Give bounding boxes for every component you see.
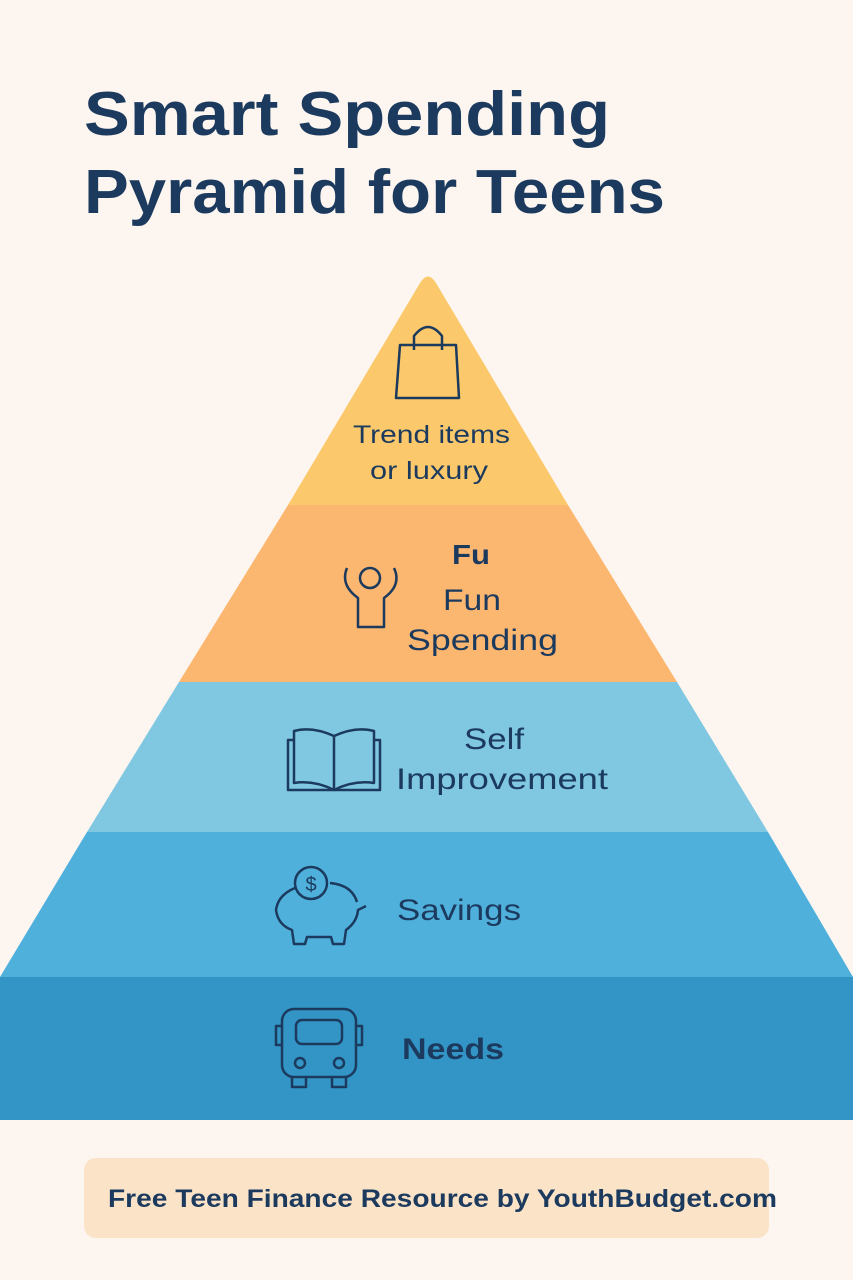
layer: self improvement — [87, 682, 768, 832]
layer: needs — [0, 977, 853, 1120]
footer banner — [84, 1158, 777, 1238]
text: savings: Savings — [397, 894, 521, 927]
text: fun spending — [407, 539, 558, 657]
footer banner: Free Teen Finance Resource by YouthBudget.com — [108, 1185, 777, 1213]
icon: bus — [276, 1009, 362, 1087]
text: self improvement: Improvement — [396, 763, 609, 796]
text: trend items: Trend items — [353, 421, 510, 449]
icon: person — [345, 568, 396, 627]
title: Smart Spending — [84, 80, 610, 149]
layer: fun spending — [179, 505, 677, 682]
text: fun spending: Spending — [407, 624, 558, 657]
icon: piggy bank — [276, 867, 366, 944]
title: Pyramid for Teens — [84, 158, 665, 227]
icon: shopping bag — [396, 327, 459, 398]
text: fun spending: Fun — [443, 584, 501, 617]
icon: piggy bank: $ — [305, 874, 317, 896]
layer: savings — [0, 832, 853, 977]
pyramid — [0, 276, 853, 1120]
icon: book — [288, 729, 380, 790]
text: self improvement: Self — [464, 723, 525, 756]
layer: trend items: or luxury — [370, 457, 489, 485]
text: fun spending: Fu — [452, 539, 490, 570]
text: needs: Needs — [402, 1033, 504, 1066]
text: self improvement — [396, 723, 609, 796]
layer: trend items — [288, 276, 568, 505]
title — [84, 80, 665, 227]
